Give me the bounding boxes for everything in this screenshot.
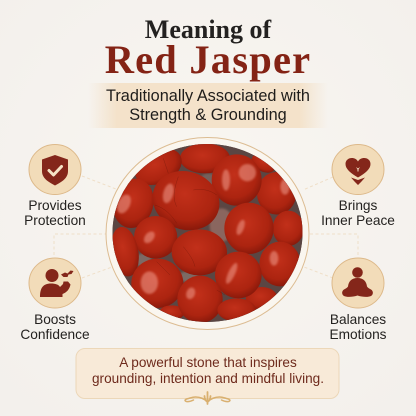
label: Provides Protection <box>24 198 86 228</box>
ornament <box>185 392 230 404</box>
highlights <box>114 164 290 300</box>
background and illustration <box>28 83 384 405</box>
icon: person with raised hand <box>29 258 81 308</box>
label: Brings Inner Peace: Inner Peace <box>321 213 395 228</box>
footer box <box>76 348 339 404</box>
title: Red Jasper: Red Jasper <box>105 37 311 82</box>
icon: heart with lotus <box>332 144 384 194</box>
cracks <box>155 158 225 295</box>
footer text: grounding, intention and mindful living. <box>92 371 324 386</box>
label: Provides Protection: Provides <box>28 198 82 213</box>
subtitle: Traditionally Associated with <box>106 87 310 105</box>
subtitle <box>106 87 310 124</box>
label: Brings Inner Peace <box>321 198 395 228</box>
label: Boosts Confidence: Boosts <box>34 312 76 327</box>
footer text: A powerful stone that inspires <box>119 355 297 370</box>
label: Balances Emotions: Balances <box>330 312 386 327</box>
label: Boosts Confidence: Confidence <box>20 327 90 342</box>
label: Balances Emotions <box>329 312 387 342</box>
central stone photo circle <box>106 138 309 330</box>
label: Provides Protection: Protection <box>24 213 86 228</box>
icon: shield with check <box>29 144 81 194</box>
label: Boosts Confidence <box>20 312 90 342</box>
subtitle: Strength & Grounding <box>129 106 287 124</box>
label: Brings Inner Peace: Brings <box>339 198 377 213</box>
footer text <box>92 355 324 386</box>
label: Balances Emotions: Emotions <box>329 327 387 342</box>
dashed connectors <box>54 176 358 278</box>
icon: meditating figure <box>332 258 384 308</box>
title: Meaning of: Meaning of <box>145 15 271 44</box>
subtitle band <box>88 83 328 128</box>
